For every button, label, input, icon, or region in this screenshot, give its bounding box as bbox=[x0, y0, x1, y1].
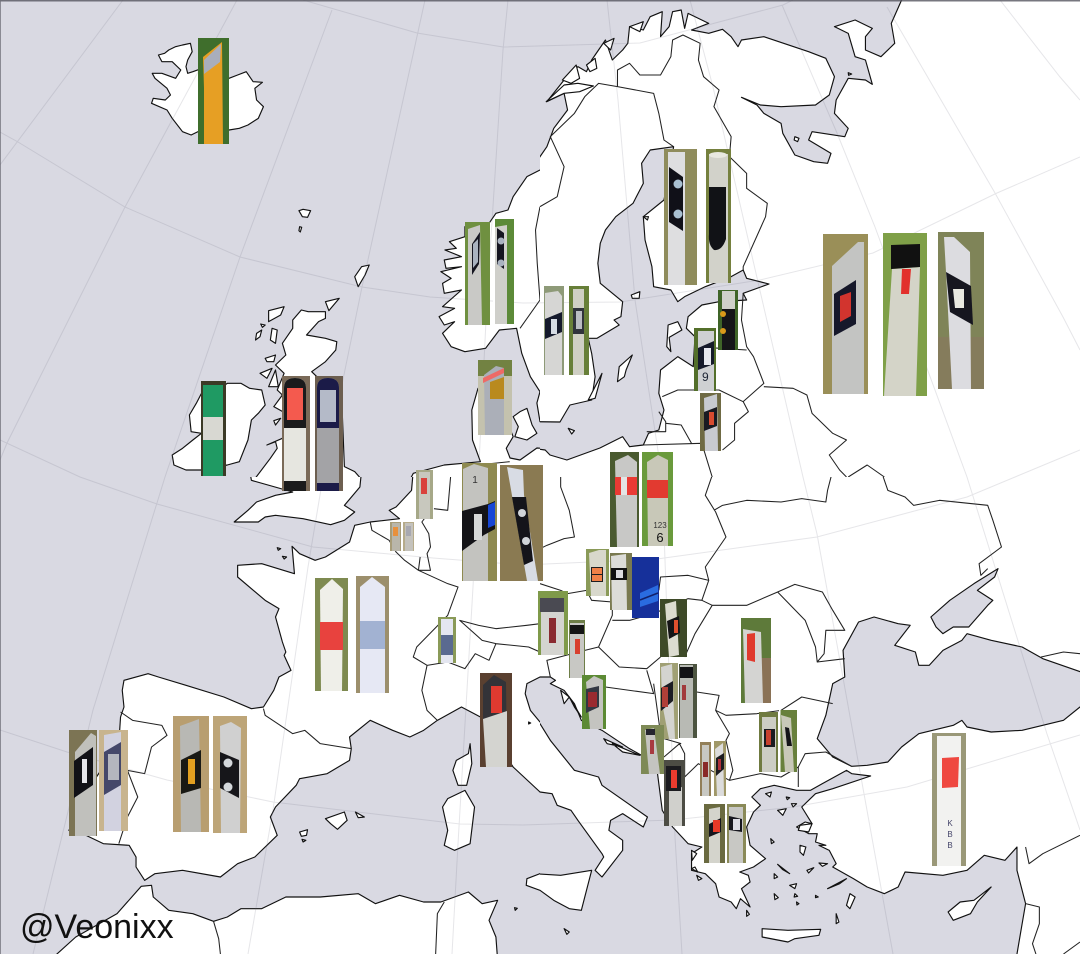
post: Finland, right bbox=[706, 149, 731, 283]
map region: south-west, France, Iberia, North Africa bbox=[56, 477, 540, 954]
post: Italy bbox=[480, 673, 512, 767]
post: Russia, middle bbox=[883, 233, 927, 396]
post: Denmark bbox=[478, 360, 512, 435]
post: Slovenia bbox=[569, 620, 585, 678]
map region: north-east, Fennoscandia, Baltic, Russia bbox=[540, 0, 1080, 477]
post: Austria bbox=[538, 591, 568, 655]
post: United Kingdom, right bbox=[315, 376, 343, 491]
post: Turkey: K bbox=[947, 819, 953, 828]
post: Belgium, left bbox=[390, 522, 401, 551]
post: Bulgaria, right bbox=[779, 710, 797, 772]
post: Russia, left bbox=[823, 234, 868, 394]
post: Hungary bbox=[660, 599, 687, 657]
post: Serbia, left bbox=[660, 663, 678, 739]
post: Sweden, left bbox=[544, 286, 564, 375]
post: United Kingdom, left bbox=[282, 376, 310, 491]
post: Germany, right bbox=[500, 465, 543, 581]
map region: north-west, Iceland, British Isles, west Scandinavia bbox=[150, 42, 540, 477]
post: Norway, left bbox=[465, 222, 490, 325]
post: Greece, left bbox=[704, 804, 725, 863]
post: Bosnia and Herzegovina bbox=[641, 725, 664, 774]
post: Serbia, right bbox=[679, 664, 697, 738]
post: Czech Republic bbox=[586, 549, 609, 596]
post: Belgium, right bbox=[403, 522, 414, 551]
post: Romania bbox=[741, 618, 771, 703]
post: Lithuania bbox=[700, 393, 721, 451]
post: Turkey bbox=[932, 733, 966, 866]
post: Norway, right bbox=[493, 219, 514, 324]
post: Slovakia, right bbox=[632, 557, 659, 618]
post: Estonia bbox=[718, 290, 738, 350]
post: Turkey: B bbox=[947, 830, 953, 839]
post: Sweden, right bbox=[569, 286, 589, 375]
post: Portugal, right bbox=[99, 730, 128, 831]
post: Poland, right bbox=[642, 452, 673, 546]
post: Russia, right bbox=[938, 232, 984, 389]
post: Montenegro and Albania bbox=[664, 760, 685, 826]
post: Latvia bbox=[694, 328, 716, 391]
post: France, left bbox=[315, 578, 348, 691]
post: Spain, right bbox=[213, 716, 247, 833]
credit text: @Veonixx bbox=[20, 908, 174, 946]
post: Portugal, left bbox=[69, 730, 97, 836]
post: Germany, left bbox=[462, 463, 497, 581]
post: Latvia: 9 bbox=[702, 370, 709, 384]
post: Turkey: B bbox=[947, 841, 953, 850]
post: Poland, right: 6 bbox=[656, 530, 664, 545]
post: North Macedonia, right bbox=[714, 741, 726, 796]
post: Finland, left bbox=[664, 149, 697, 285]
post: Poland, right: 123 bbox=[653, 521, 667, 530]
post: Poland, left bbox=[610, 452, 639, 547]
post: Bulgaria, left bbox=[759, 712, 778, 772]
post: Ireland bbox=[201, 381, 226, 476]
post: Greece, right bbox=[727, 804, 746, 863]
post: Germany, left: 1 bbox=[472, 475, 478, 486]
post: Switzerland bbox=[438, 617, 456, 663]
post: France, right bbox=[356, 576, 389, 693]
map region: south-east, Central Europe, Balkans, Turkey, Black Sea bbox=[540, 477, 1080, 954]
post: Netherlands bbox=[416, 470, 433, 519]
post: Croatia bbox=[582, 675, 606, 729]
post: Iceland bbox=[198, 38, 229, 144]
post: Slovakia, left bbox=[610, 553, 632, 610]
post: North Macedonia, left bbox=[700, 742, 711, 796]
post: Spain, left bbox=[173, 716, 209, 832]
